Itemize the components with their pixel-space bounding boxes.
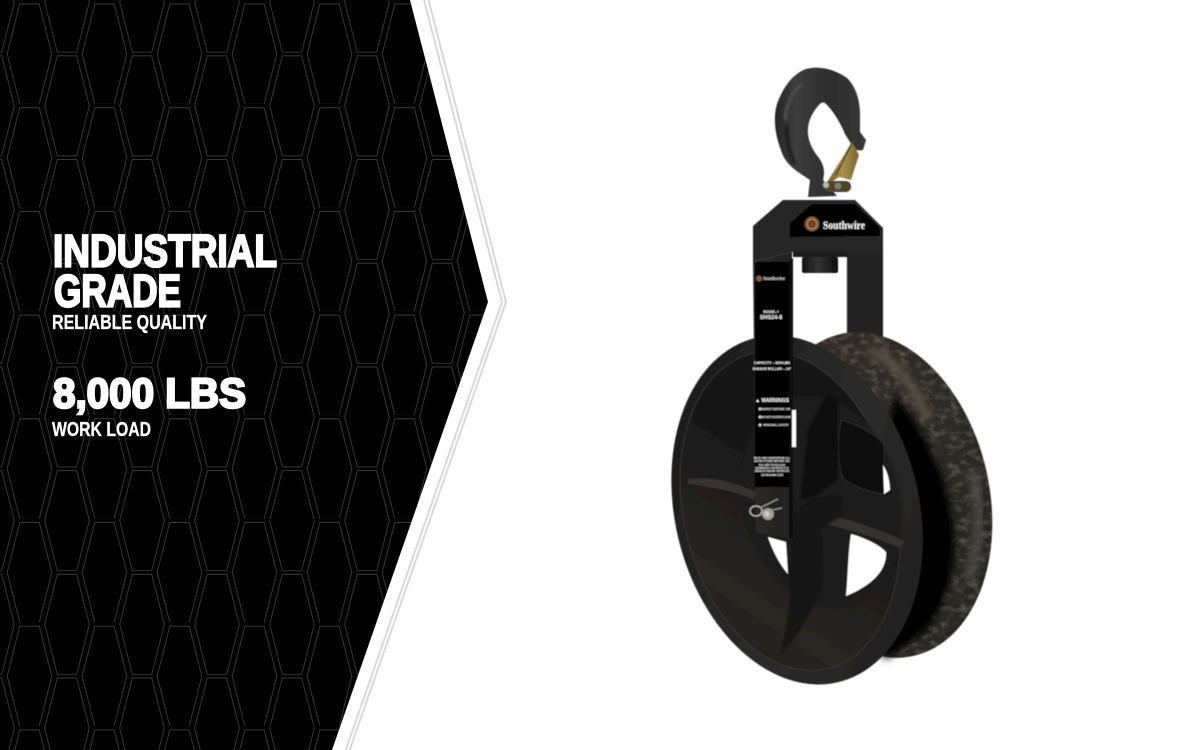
safety label on arm: INSPECT BEFORE USE [762, 407, 791, 411]
product: sheave with hook [670, 66, 994, 686]
small upper white window [883, 465, 890, 494]
brand logo on top plate [804, 216, 865, 232]
lock pin [750, 499, 782, 520]
front flange [637, 309, 957, 711]
stat: 8,000 lbs: 8,000 LBS [53, 370, 246, 416]
bracket top plate [753, 200, 883, 262]
safety label on arm [753, 262, 792, 487]
safety label on arm: ▲ WARNINGS [755, 398, 790, 404]
heading: industrial grade: GRADE [54, 266, 181, 316]
safety label on arm: WARNINGS CAN RESULT IN [755, 467, 789, 470]
safety label on arm: PERSONAL SAFETY [763, 423, 789, 427]
lower right white window [846, 534, 886, 596]
heading: industrial grade [53, 226, 277, 316]
heading: industrial grade: INDUSTRIAL [53, 226, 277, 276]
safety label on arm: SOUTHWIRE.COM [761, 474, 783, 477]
safety label on arm: FAILURE TO FOLLOW [759, 464, 786, 467]
safety label on arm: Southwire [763, 277, 786, 282]
upper right dark window [839, 420, 885, 494]
hook latch [823, 142, 859, 192]
subheading: reliable quality: RELIABLE QUALITY [52, 312, 208, 334]
wheel spokes [688, 395, 904, 655]
stat label: work load: WORK LOAD [52, 419, 151, 441]
safety label on arm: INSTRUCTIONS BEFORE USE [754, 460, 790, 463]
brand logo on top plate: Southwire [823, 220, 865, 232]
double chevron outline [345, 0, 506, 750]
front bracket arm [753, 252, 796, 540]
safety label on arm: SHEAVE ROLLER – 24" [753, 367, 792, 371]
safety label on arm: SHS24-8 [760, 315, 782, 321]
safety label on arm: DO NOT EXCEED LOAD [761, 415, 791, 419]
bearing under bracket [793, 252, 847, 273]
black chevron panel with hexagon pattern [0, 0, 488, 750]
rear bracket arm [847, 228, 883, 345]
safety label on arm: SERIOUS INJURY OR DEATH [755, 470, 789, 473]
swivel hook [775, 68, 866, 197]
safety label on arm: CAPACITY – 8000LBS [754, 361, 791, 365]
rear flange and tread [816, 332, 994, 664]
safety label on arm: MODEL # [763, 310, 779, 314]
lower left white window [768, 537, 788, 574]
wheel hub recess [721, 379, 923, 625]
safety label on arm: READ AND UNDERSTAND ALL [754, 457, 791, 460]
